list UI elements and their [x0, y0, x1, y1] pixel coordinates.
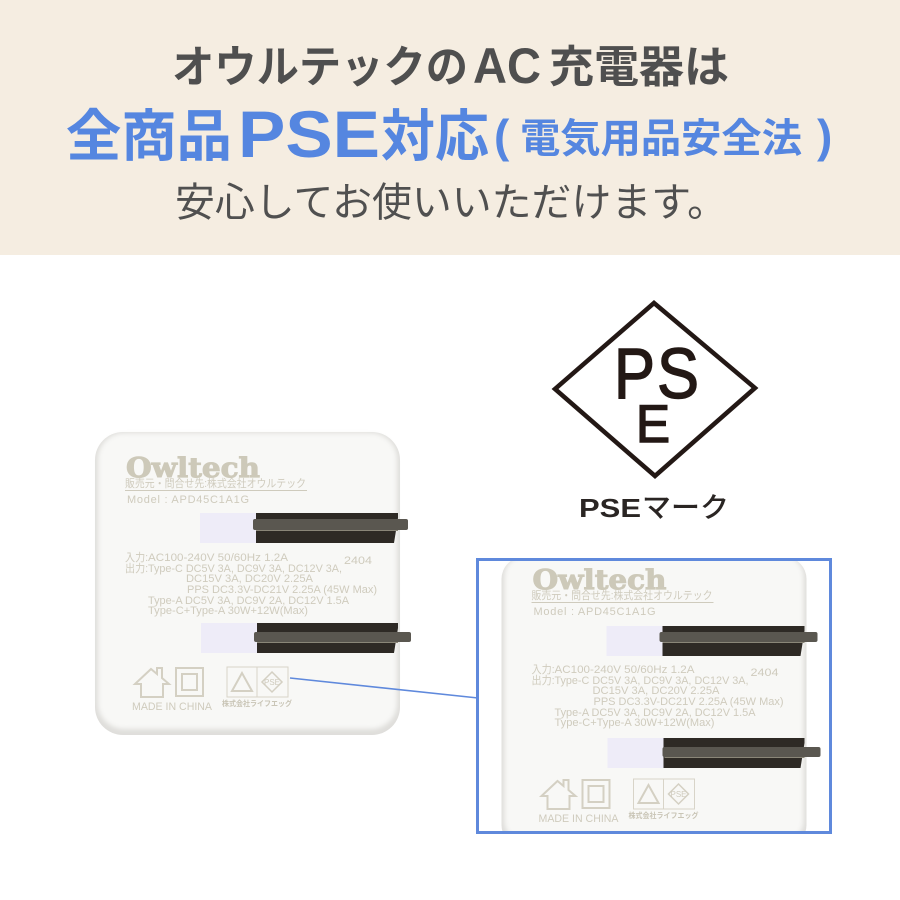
- seller line: 販売元・問合せ先:株式会社オウルテック: [125, 476, 306, 490]
- certifier name: 株式会社ライフエッグ: [222, 698, 292, 708]
- panel: enlarged charger view: [478, 556, 830, 847]
- inset specification text: DC15V 3A, DC20V 2.25A: [592, 685, 720, 697]
- header band: [0, 0, 900, 255]
- PSE mark: E: [636, 395, 670, 454]
- heading: line 2 blue: [66, 97, 832, 171]
- inset certifier name: 株式会社ライフエッグ: [628, 810, 699, 820]
- heading: line 2 blue: 電気用品安全法: [520, 117, 802, 161]
- PSE mark caption: PSE: [579, 493, 641, 523]
- inset certification marks: [634, 779, 694, 809]
- specification text: PPS DC3.3V-DC21V 2.25A (45W Max): [187, 584, 377, 596]
- heading: line 1: [172, 38, 729, 94]
- inset specification text: PPS DC3.3V-DC21V 2.25A (45W Max): [594, 696, 784, 708]
- icon: house: [135, 668, 169, 697]
- inset specification text: 2404: [750, 667, 778, 679]
- charger body: [95, 432, 400, 735]
- heading: line 2 blue: PSE: [238, 97, 380, 171]
- heading: line 1: AC: [473, 38, 541, 94]
- lower plug slot: [201, 623, 411, 653]
- PSE mark: P: [614, 335, 655, 414]
- PSE mark caption: マーク: [642, 492, 729, 523]
- inset specification text: [532, 663, 784, 729]
- certification marks: PSE: [264, 678, 280, 687]
- heading: line 1: 充電器は: [549, 43, 729, 92]
- charger logo: Owltech: [126, 453, 260, 484]
- inset specification text: Type-C DC5V 3A, DC9V 3A, DC12V 3A,: [554, 675, 748, 687]
- inset specification text: Type-C+Type-A 30W+12W(Max): [554, 717, 714, 729]
- certification marks: [227, 667, 288, 697]
- inset lower slot: [608, 738, 820, 768]
- made in china: MADE IN CHINA: [132, 701, 213, 713]
- charger: main view: [95, 432, 411, 735]
- specification text: Type-C+Type-A 30W+12W(Max): [148, 605, 308, 617]
- inset icon: double square: [582, 780, 610, 808]
- specification text: [125, 551, 377, 617]
- heading: line 2 blue: (: [494, 110, 510, 162]
- specification text: 2404: [344, 555, 372, 567]
- specification text: 入力:: [125, 551, 148, 564]
- heading: line 2 blue: 全商品: [66, 105, 232, 168]
- inset specification text: 出力:: [532, 674, 554, 687]
- inset model number: Model : APD45C1A1G: [534, 606, 656, 618]
- PSE mark caption: [579, 492, 729, 523]
- specification text: AC100-240V 50/60Hz 1.2A: [148, 552, 289, 564]
- upper plug slot: [200, 513, 408, 543]
- heading: line 2 blue: 対応: [381, 105, 489, 168]
- inset seller line: 販売元・問合せ先:株式会社オウルテック: [532, 588, 712, 602]
- connector line: [290, 678, 478, 698]
- enlarged view frame: [478, 560, 830, 832]
- specification text: 出力:: [125, 562, 148, 575]
- inset icon: house: [542, 780, 576, 809]
- specification text: DC15V 3A, DC20V 2.25A: [186, 573, 314, 585]
- model number: Model : APD45C1A1G: [127, 494, 249, 506]
- inset specification text: AC100-240V 50/60Hz 1.2A: [554, 664, 695, 676]
- heading: line 3: 安心してお使いいただけます。: [175, 181, 727, 225]
- icon: double square: [176, 668, 203, 696]
- inset specification text: 入力:: [532, 663, 554, 676]
- inset made in china: MADE IN CHINA: [538, 813, 619, 825]
- PSE mark: [555, 303, 755, 476]
- PSE mark: S: [657, 335, 699, 414]
- inset logo: Owltech: [532, 565, 667, 596]
- inset specification text: Type-A DC5V 3A, DC9V 2A, DC12V 1.5A: [554, 707, 756, 719]
- inset certification marks: PSE: [670, 790, 687, 799]
- specification text: Type-A DC5V 3A, DC9V 2A, DC12V 1.5A: [148, 595, 350, 607]
- charger: enlarged: [502, 556, 820, 847]
- heading: line 2 blue: ): [817, 110, 832, 162]
- inset upper slot: [606, 626, 818, 656]
- heading: line 1: オウルテックの: [172, 43, 468, 92]
- specification text: Type-C DC5V 3A, DC9V 3A, DC12V 3A,: [148, 563, 342, 575]
